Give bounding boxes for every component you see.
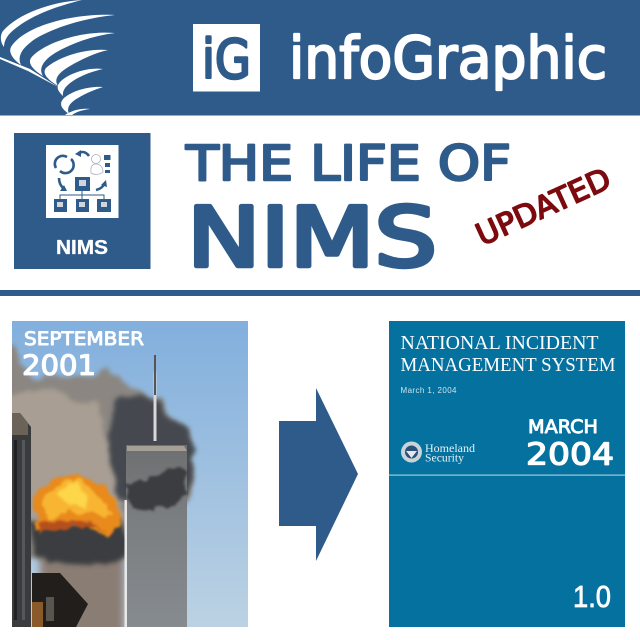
Homeland Security wordmark: Homeland [425,443,475,455]
caption: September 2001: SEPTEMBER [24,329,144,350]
tower [126,445,187,627]
cover title: NATIONAL INCIDENT [400,332,598,354]
panel: NIMS cover March 2004 [389,321,625,627]
header banner [0,0,640,116]
tower damage [128,468,186,511]
wordmark: infoGraphic: infoGraphic [289,24,607,92]
cover title: MANAGEMENT SYSTEM [400,354,616,376]
divider band [0,290,640,296]
logo: iG: iG [202,28,251,91]
smoke plume [0,345,192,560]
panel: NIMS badge [14,133,150,269]
heading: The Life Of: THE LIFE OF [185,136,511,192]
Homeland Security wordmark: Security [425,452,464,464]
cover date: March 1, 2004 [400,386,457,395]
lower haze [34,558,124,627]
icon: NIMS diagram [46,145,118,218]
caption: March 2004: MARCH [528,417,598,438]
arrow [279,388,358,561]
Homeland Security wordmark [425,443,475,464]
antenna [154,369,156,441]
icon: Homeland Security seal [401,442,422,462]
icon: tornado [0,0,115,115]
fireball [33,473,122,538]
caption: March 2004: 2004 [526,438,614,472]
heading: NIMS: NIMS [187,191,437,286]
foreground building: left [12,413,31,627]
label: NIMS: NIMS [56,237,108,259]
cover title [400,332,616,376]
caption: September 2001 [22,329,144,382]
caption: March 2004 [526,417,614,472]
caption: September 2001: 2001 [22,348,96,382]
version number: 1.0 [573,579,611,614]
panel: September 2001 photo [0,321,248,640]
stamp: Updated: UPDATED [471,162,616,253]
foreground building: rooftop [32,573,88,627]
dark smoke under fire [32,515,126,566]
